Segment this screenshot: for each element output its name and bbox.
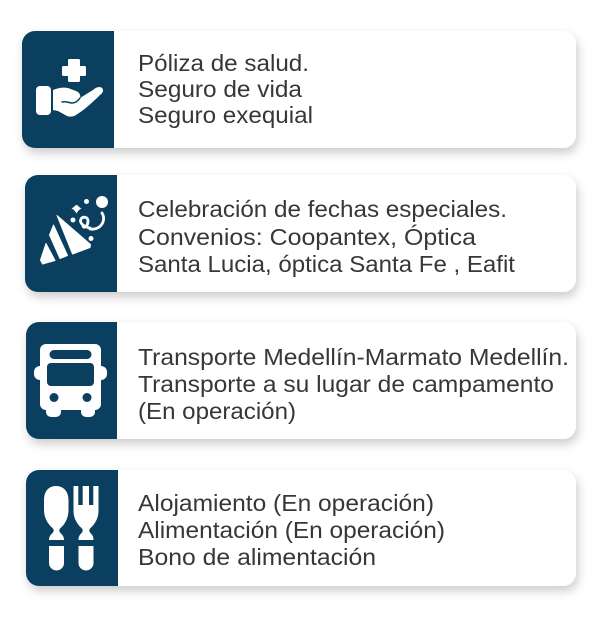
text: celebraciones: Convenios: Coopantex, Óptica (138, 224, 476, 250)
panel: celebraciones y convenios (25, 175, 576, 292)
icon tile: transporte (26, 322, 117, 439)
icon tile: celebraciones (25, 175, 117, 292)
icon: hand with medical cross (36, 59, 103, 117)
text: seguros: Seguro de vida (138, 76, 302, 102)
text: transporte (138, 344, 569, 424)
text: alimentacion: Bono de alimentación (138, 544, 376, 570)
text: alimentacion: Alojamiento (En operación) (138, 490, 434, 516)
icon: party popper (40, 216, 90, 264)
text: alimentacion (138, 490, 445, 570)
panel: seguros (22, 31, 576, 148)
panel: transporte (26, 322, 576, 439)
text: seguros: Póliza de salud. (138, 50, 309, 76)
text: seguros: Seguro exequial (138, 102, 313, 128)
icon tile: seguros (22, 31, 114, 148)
icon: spoon (44, 486, 68, 571)
icon tile: alimentacion (26, 470, 118, 586)
text: transporte: Transporte Medellín-Marmato Medellín. (138, 344, 569, 370)
panel: alojamiento y alimentacion (26, 470, 576, 586)
icon: fork (74, 486, 98, 571)
icon: bus (34, 344, 107, 417)
text: celebraciones: Celebración de fechas especiales. (138, 196, 507, 222)
text: seguros (138, 50, 313, 128)
text: transporte: (En operación) (138, 398, 296, 424)
text: celebraciones: Santa Lucia, óptica Santa Fe , Eafit (138, 251, 516, 277)
text: transporte: Transporte a su lugar de campamento (138, 371, 554, 397)
text: celebraciones (138, 196, 516, 277)
icon: confetti streamer (81, 213, 104, 229)
text: alimentacion: Alimentación (En operación) (138, 517, 445, 543)
